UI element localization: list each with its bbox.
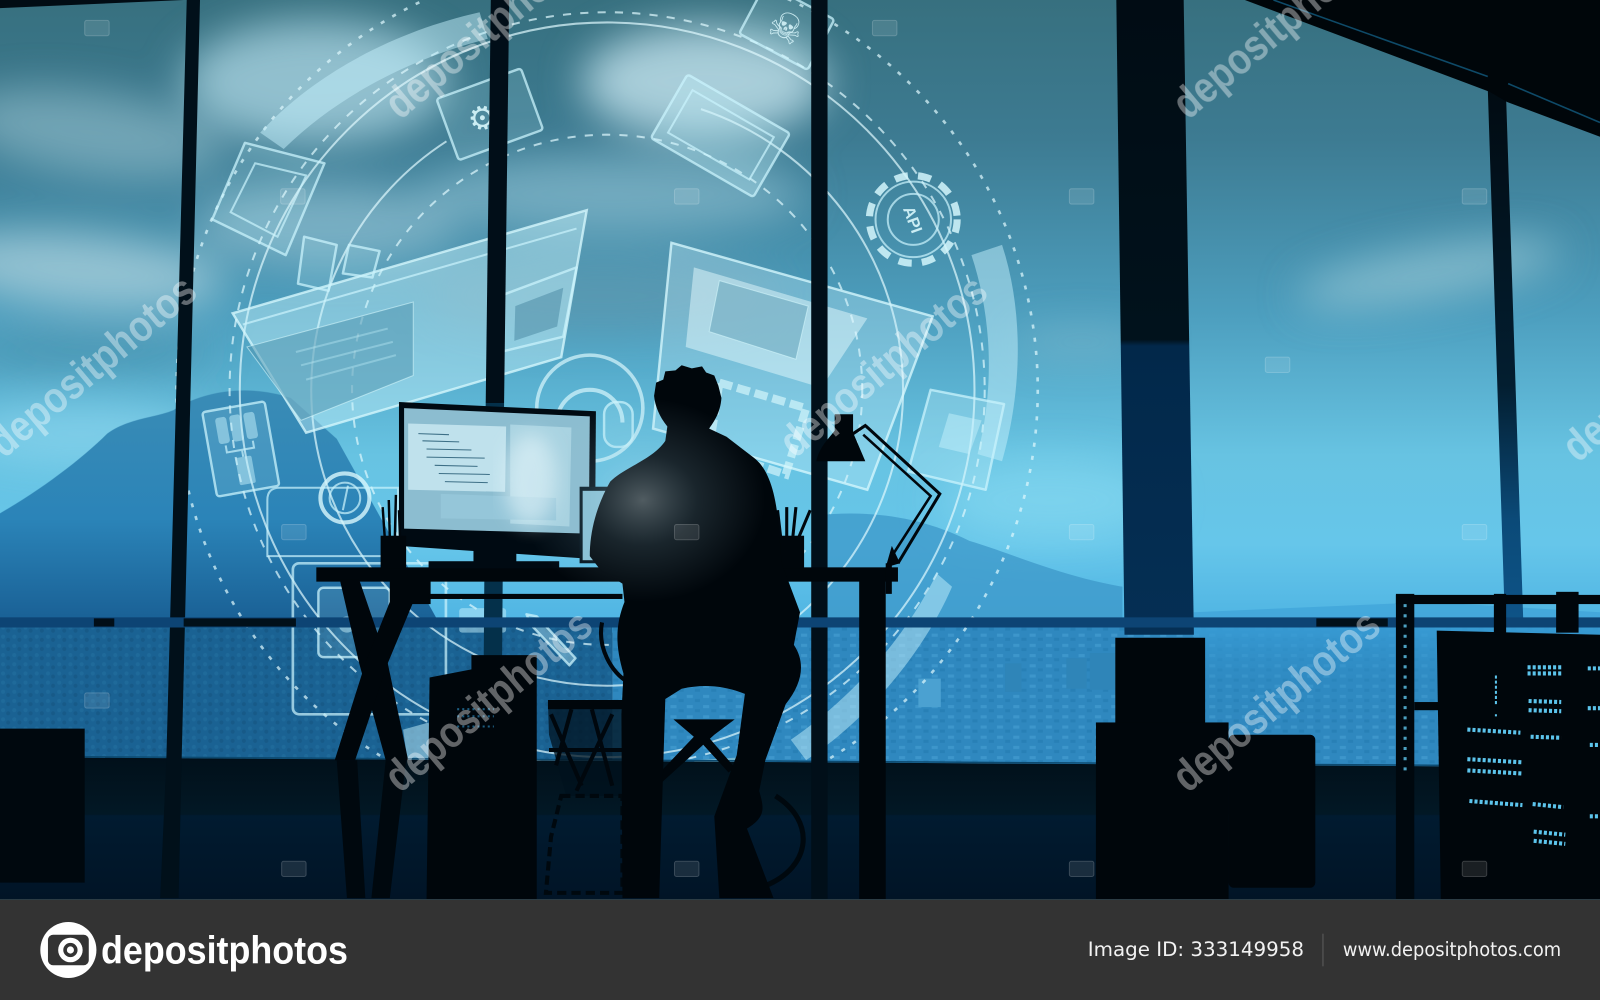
mountain on the left [0,390,439,624]
icon: headphones [537,355,643,461]
atmospheric haze over far city [1194,624,1600,727]
stool [601,622,803,886]
pencil cup right [776,507,810,568]
browser window card [233,210,587,433]
icon: tablet card upper left [212,143,380,291]
desk lamp [816,414,940,567]
main column [1116,0,1194,635]
diagonal watermark words: depositphotos [770,265,997,467]
storage box left [0,729,85,883]
icon: API gear [869,176,957,263]
watermark camera marks [85,20,1487,877]
icon: picture card right [908,390,1004,490]
PC tower [427,655,537,900]
top-left frame [0,0,184,8]
dashed orbit rings [177,0,1038,820]
icon: pencil [527,614,576,665]
logo wordmark: depositphotos [101,929,348,972]
logo: camera badge [40,922,96,978]
person silhouette [520,365,801,898]
ceiling right [1245,0,1600,137]
laptop with code window [653,243,933,490]
icon: API gear: API [899,204,925,236]
tablet on desk [580,487,610,563]
server LEDs [1467,667,1600,844]
sky background [0,0,1600,633]
barrels and column base [1096,638,1315,900]
icon: settings gears card: ⚙ [462,95,503,141]
desk [316,563,898,900]
footer bar [0,899,1600,1000]
distant hazy hills right [1194,602,1600,633]
mullion 3 [811,0,828,900]
computer monitor [399,402,596,568]
icon: skull card [739,0,834,70]
icon: dial circle [320,473,369,522]
thick arc segments [260,12,488,149]
icon: laptop outline top [651,74,790,197]
icon: flowchart card [202,401,279,497]
monitor backlight glow on person [520,398,765,602]
icon: skull card: ☠ [760,0,812,56]
mullion 2 [486,0,509,403]
desk legs crossing [340,580,408,760]
mullion 1 [160,0,200,898]
basket [546,700,624,893]
landscape left: forest [0,624,612,767]
server rack [1396,592,1600,900]
diagonal watermark words: depositphotos [375,600,602,802]
large outline panels lower left [267,488,506,714]
leg reflections [337,760,365,898]
website: www.depositphotos.com [1343,938,1561,961]
mullion right [1488,88,1523,628]
buildings [918,653,1115,707]
handrail [0,617,1600,628]
diagonal watermark words: depositphotos [1163,600,1390,802]
image id: Image ID: 333149958 [1088,938,1304,961]
pencil cup left [381,495,406,568]
holographic interface [177,0,1038,820]
floor and sill [0,756,1600,900]
pale paper panels below desk [403,722,745,794]
icon: settings gears card [436,68,543,160]
landscape right: city [612,624,1600,767]
hills behind lamp [816,514,1122,633]
clouds [0,20,1563,541]
